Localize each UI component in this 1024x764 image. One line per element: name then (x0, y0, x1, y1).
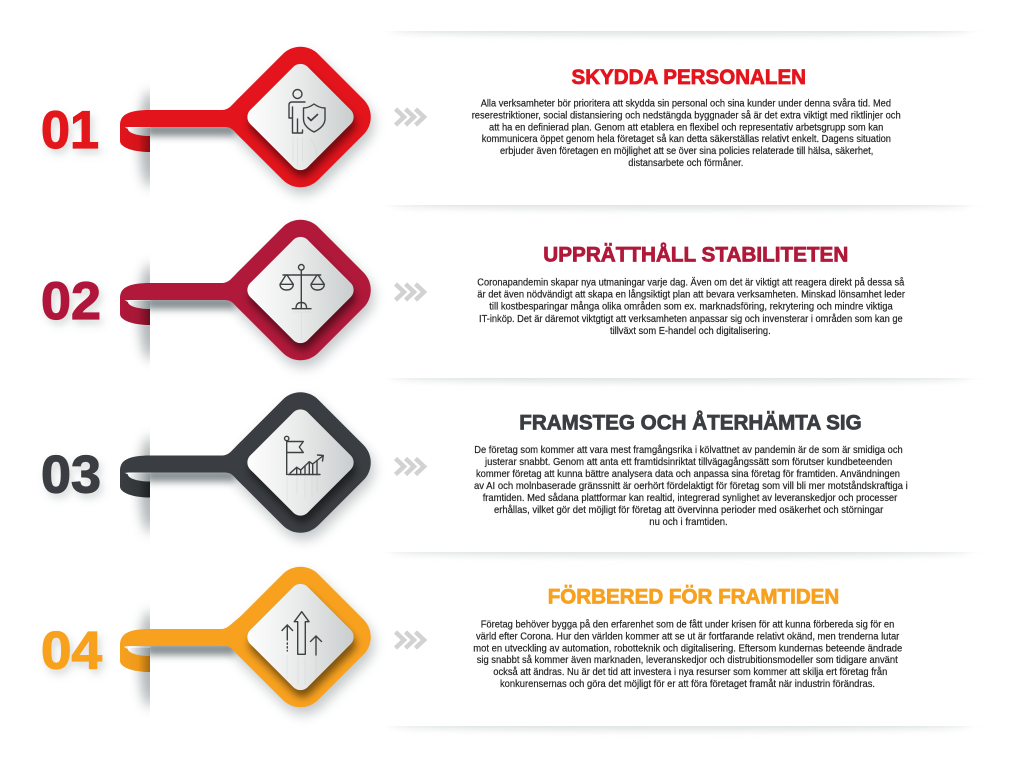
text block 01: kommunicera öppet genom hela företaget så kan detta säkerställas relativt enkelt. Dagens situation (482, 133, 891, 145)
text block 03: nu och i framtiden. (649, 517, 728, 528)
text block 02: tillväxt som E-handel och digitalisering. (610, 326, 771, 337)
heading 03: FRAMSTEG OCH ÅTERHÄMTA SIG (519, 408, 862, 434)
text block 04: mot en utveckling av automation, robotteknik och digitalisering. Eftersom kundernas beteende ändrade (473, 643, 903, 654)
number 04: 04 (41, 622, 103, 680)
text block 04: värld efter Corona. Hur den världen kommer att se ut är fortfarande relativt okänd, men trenderna lutar (476, 631, 900, 642)
panel: step 01 (41, 36, 901, 205)
ribbon and diamond badge 01 (120, 46, 380, 200)
ribbon and diamond badge 04 (120, 566, 380, 720)
text block 01: Alla verksamheter bör prioritera att skydda sin personal och sina kunder under denna svåra tid. Med (481, 98, 891, 110)
arrows 04 (396, 632, 424, 648)
text block 01: att ha en definierad plan. Genom att etablera en flexibel och representativ arbetsgrupp som kan (489, 122, 883, 133)
divider shadow: top (394, 31, 968, 38)
text block 03 (474, 444, 908, 528)
divider shadow: row 3-4 (394, 552, 968, 558)
text block 02: till kostbesparingar många olika områden som ex. marknadsföring, rekrytering och mindre viktiga (489, 301, 893, 313)
text block 03: kommer företag att kunna bättre analysera data och anpassa sina företag för framtiden. Användningen (476, 469, 900, 480)
icon: person with shield (289, 90, 325, 133)
panel: step 03 (41, 382, 908, 550)
icon: scales (280, 264, 324, 309)
text block 02: Coronapandemin skapar nya utmaningar varje dag. Även om det är viktigt att reagera direkt på dessa så (477, 277, 905, 289)
text block 04: också att ändras. Nu är det tid att investera i nya resurser som kommer att skilja ert företag från (493, 666, 887, 678)
text block 03: av AI och molnbaserade gränssnitt är oerhört fördelaktigt för företag som vill bli mer motståndskraftiga i (474, 480, 908, 492)
number 01: 01 (41, 101, 99, 160)
heading 01: SKYDDA PERSONALEN (572, 64, 806, 89)
text block 03: framtiden. Med sådana plattformar kan realtid, integrerad synlighet av leveranskedjor och processer (483, 492, 898, 504)
text block 03: erhållas, vilket gör det möjligt för företag att övervinna perioder med osäkerhet och störningar (494, 504, 884, 516)
number 03: 03 (41, 446, 101, 504)
text block 02 (477, 277, 906, 337)
text block 01: reserestriktioner, social distansiering och nedstängda byggnader så är det extra viktigt med riktlinjer och (472, 109, 901, 121)
heading 02: UPPRÄTTHÅLL STABILITETEN (543, 241, 848, 267)
heading 04: FÖRBERED FÖR FRAMTIDEN (548, 584, 839, 608)
text block 04: konkurensernas och göra det möjligt för er att föra företaget framåt när industrin förändras. (500, 678, 875, 690)
text block 02: är det även nödvändigt att skapa en långsiktigt plan att bevara verksamheten. Minskad lönsamhet leder (477, 289, 906, 301)
text block 01: distansarbete och förmåner. (628, 157, 743, 169)
panel: step 04 (41, 556, 903, 725)
text block 01 (472, 98, 901, 169)
arrows 03 (396, 458, 424, 474)
text block 04: sig snabbt så kommer även marknaden, leveranskedjor och distrubitionsmodeller som tidigare använt (477, 654, 898, 666)
panel: step 02 (41, 209, 906, 378)
text block 01: erbjuder även företagen en möjlighet att se över sina policies relaterade till hälsa, säkerhet, (500, 146, 873, 157)
text block 04: Företag behöver bygga på den erfarenhet som de fått under krisen för att kunna förbereda sig för en (481, 618, 894, 630)
number 02: 02 (41, 272, 101, 331)
divider shadow: row 2-3 (394, 378, 968, 384)
text block 04 (473, 618, 903, 690)
arrows 02 (396, 284, 424, 300)
text block 03: De företag som kommer att vara mest framgångsrika i kölvattnet av pandemin är de som är smidiga och (474, 444, 903, 456)
text block 03: justerar snabbt. Genom att anta ett framtidsinriktat tillvägagångssätt som förutser kundbeteenden (484, 456, 892, 468)
icon: flag and rising chart (284, 436, 323, 474)
text block 02: IT-inköp. Det är däremot viktgtigt att verksamheten anpassar sig och invensterar i områden som kan ge (479, 313, 903, 325)
ribbon and diamond badge 03 (120, 392, 380, 546)
ribbon and diamond badge 02 (120, 220, 380, 373)
divider shadow: row 1-2 (394, 205, 968, 212)
icon: three up arrows (282, 612, 322, 655)
divider shadow: bottom (394, 726, 968, 732)
arrows 01 (396, 109, 424, 125)
